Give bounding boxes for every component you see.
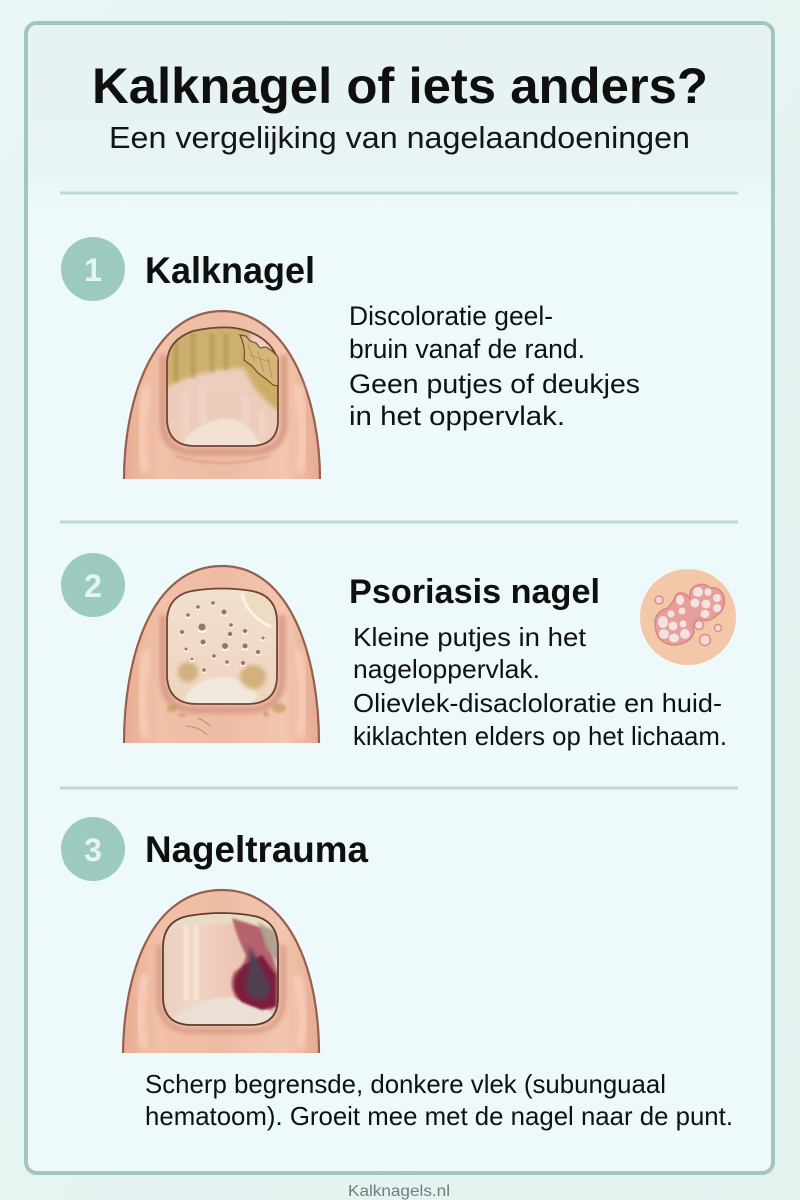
number badge 1: 1 bbox=[84, 252, 102, 288]
number badge 2 bbox=[61, 553, 125, 617]
text: Kalknagel description: in het oppervlak. bbox=[349, 401, 565, 431]
heading: Nageltrauma: Nageltrauma bbox=[145, 829, 368, 870]
text: Psoriasis description: kiklachten elders op het lichaam. bbox=[353, 721, 727, 751]
text: Nageltrauma description: hematoom). Groeit mee met de nagel naar de punt. bbox=[145, 1101, 733, 1131]
number badge 3 bbox=[61, 817, 125, 881]
illustration: nail with pits bbox=[124, 566, 319, 743]
title: Kalknagel of iets anders? bbox=[92, 58, 708, 114]
section 1: Kalknagel bbox=[61, 237, 640, 479]
number badge 1 bbox=[61, 237, 125, 301]
text: Psoriasis description: Kleine putjes in het bbox=[353, 622, 587, 652]
text: Psoriasis description: nageloppervlak. bbox=[353, 654, 540, 684]
number badge 3: 3 bbox=[84, 832, 102, 868]
text: Kalknagel description: Geen putjes of deukjes bbox=[349, 369, 640, 399]
illustration: nail with subungual hematoma bbox=[123, 890, 319, 1053]
text: Psoriasis description bbox=[353, 622, 727, 751]
footer source: Kalknagels.nl bbox=[348, 1183, 450, 1200]
heading: Kalknagel: Kalknagel bbox=[145, 250, 315, 291]
icon: psoriasis skin patch bbox=[640, 569, 736, 665]
illustration: nail with yellow-brown discolouration bbox=[124, 311, 320, 479]
section 2: Psoriasis nagel bbox=[61, 553, 736, 751]
text: Psoriasis description: Olievlek-disacloloratie en huid- bbox=[353, 688, 722, 718]
text: Kalknagel description: bruin vanaf de rand. bbox=[349, 334, 585, 364]
text: Nageltrauma description bbox=[145, 1069, 733, 1131]
text: Nageltrauma description: Scherp begrensde, donkere vlek (subunguaal bbox=[145, 1069, 666, 1099]
section 3: Nageltrauma bbox=[61, 817, 733, 1131]
number badge 2: 2 bbox=[84, 568, 102, 604]
subtitle: Een vergelijking van nagelaandoeningen bbox=[109, 120, 690, 155]
heading: Psoriasis nagel: Psoriasis nagel bbox=[349, 573, 600, 611]
text: Kalknagel description: Discoloratie geel- bbox=[349, 301, 553, 331]
text: Kalknagel description bbox=[349, 301, 640, 431]
